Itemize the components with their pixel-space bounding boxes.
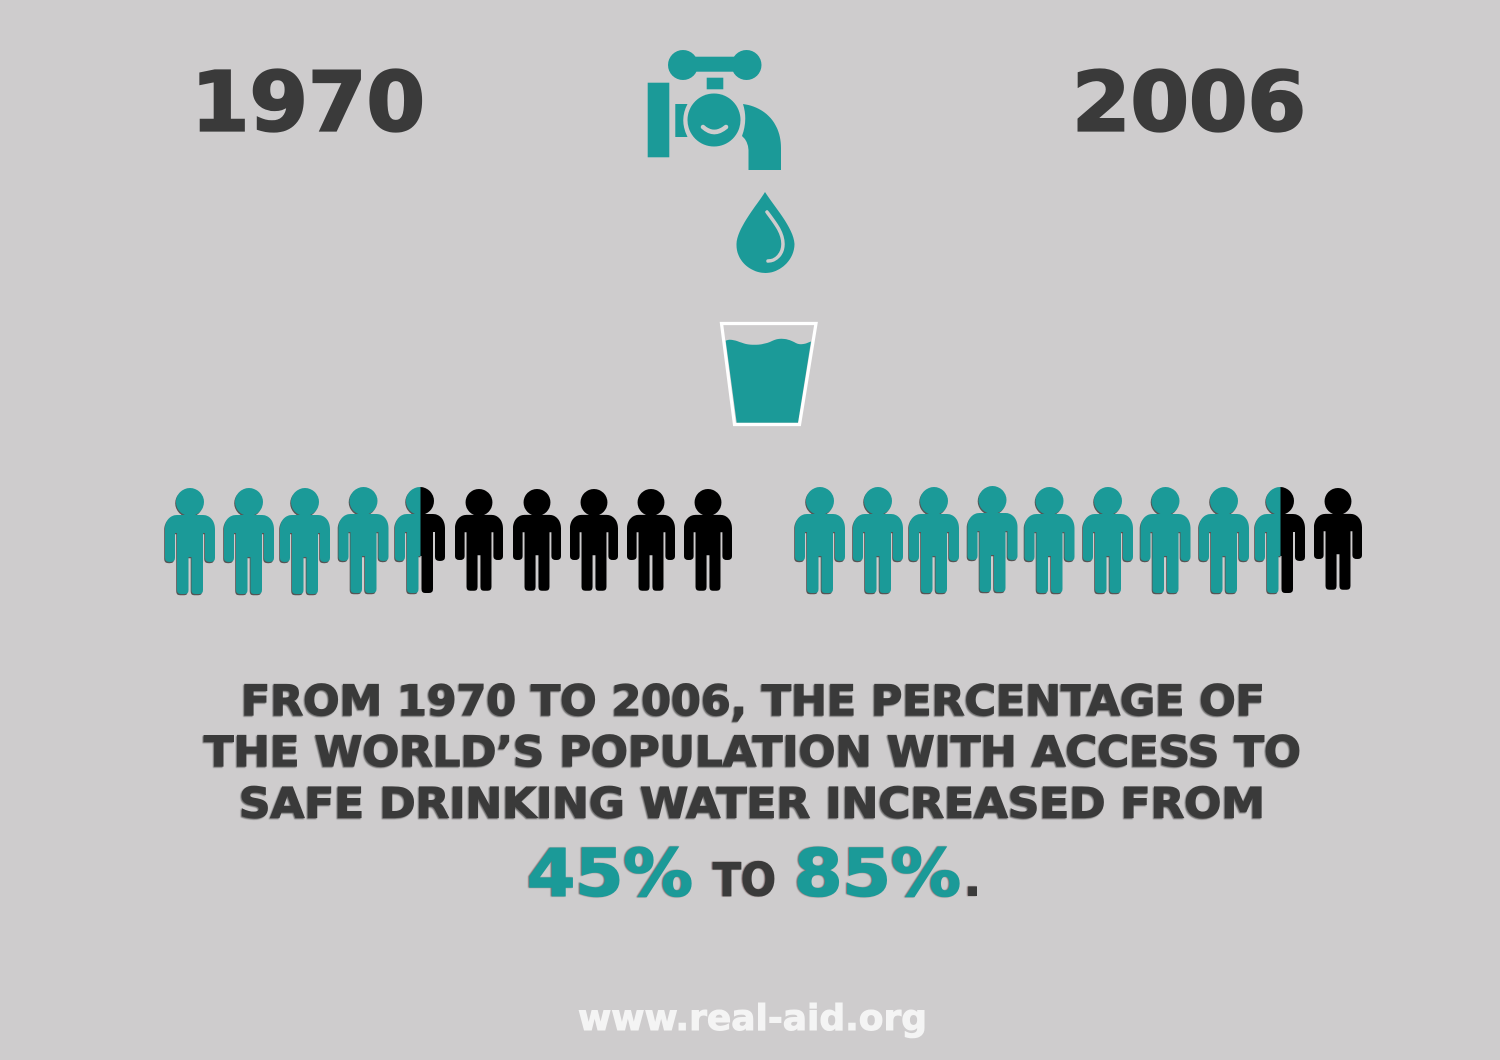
statement text: THE WORLD’S POPULATION WITH ACCESS TO (204, 727, 1301, 776)
statement text: SAFE DRINKING WATER INCREASED FROM (239, 778, 1265, 828)
icon: water drop (736, 192, 794, 273)
highlighted percentages: 85% (794, 836, 961, 912)
highlighted percentages: 45% (527, 836, 693, 912)
icon: glass of water (722, 324, 816, 424)
pictogram: 1970 population, 45% with access (164, 487, 732, 595)
icon: water tap (648, 50, 781, 170)
website URL: www.real-aid.org (578, 998, 927, 1039)
statement text: FROM 1970 TO 2006, THE PERCENTAGE OF (241, 676, 1265, 725)
statement text (204, 676, 1301, 828)
pictogram: 2006 population, 85% with access (794, 486, 1362, 594)
highlighted percentages: . (964, 854, 981, 906)
year: 1970: 1970 (191, 56, 425, 150)
year: 2006: 2006 (1072, 56, 1306, 150)
highlighted percentages (527, 836, 981, 912)
highlighted percentages: TO (713, 854, 776, 906)
